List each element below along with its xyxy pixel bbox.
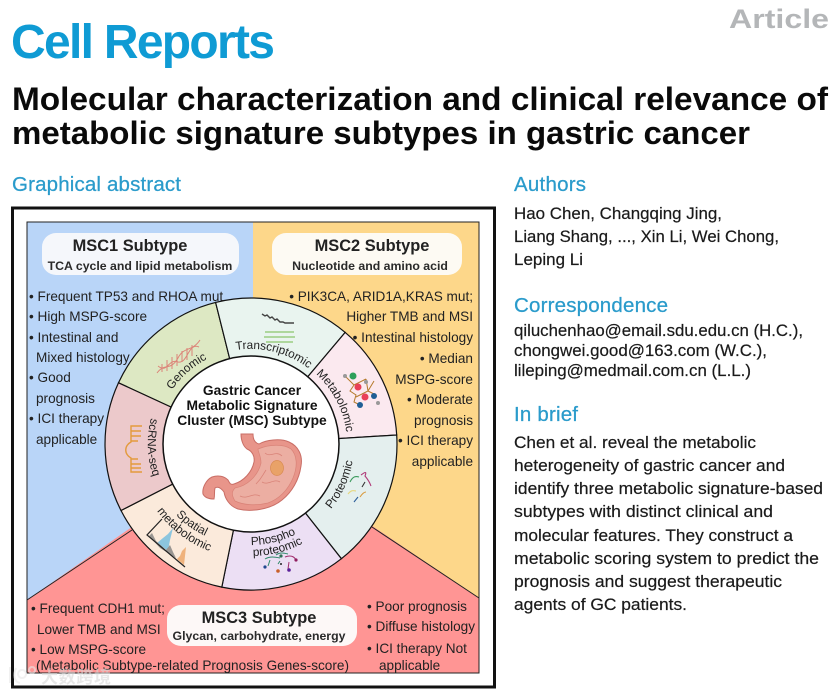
segment: genomic — [118, 302, 251, 444]
MSC3 features list right: applicable — [379, 658, 440, 673]
MSC3 features list right: • Poor prognosis — [367, 599, 467, 614]
segment: scRNA-seq — [105, 383, 251, 510]
ring label: Spatial metabolomic: Spatial — [177, 510, 208, 536]
in brief text: prognosis and suggest therapeutic — [514, 572, 782, 591]
heading: graphical abstract: Graphical abstract — [12, 173, 181, 196]
MSC1 heading pill — [42, 233, 239, 275]
authors text: Liang Shang, ..., Xin Li, Wei Chong, — [514, 227, 779, 246]
segment: metabolomic — [251, 332, 397, 444]
outer frame — [12, 208, 494, 687]
MSC2 heading pill — [272, 233, 462, 275]
watermark — [10, 667, 111, 687]
MSC1 features list: prognosis — [36, 391, 95, 406]
correspondence text: qiluchenhao@email.sdu.edu.cn (H.C.), — [514, 321, 803, 340]
in brief text: Chen et al. reveal the metabolic — [514, 433, 756, 452]
ring label: Metabolomic: Metabolomic — [316, 368, 354, 432]
MSC2 features list: • Median — [420, 351, 473, 366]
MSC2 features list: • Intestinal histology — [353, 330, 473, 345]
MSC3 features list left: • Frequent CDH1 mut; — [31, 601, 165, 616]
heading: authors: Authors — [514, 173, 586, 196]
panel: MSC3 background — [27, 444, 479, 673]
center title: Gastric Cancer — [203, 383, 302, 398]
in brief text: identify three metabolic signature-based — [514, 479, 823, 498]
MSC3 features list left: Lower TMB and MSI — [37, 622, 161, 637]
segment: proteomic — [251, 435, 397, 559]
MSC3 heading pill — [167, 605, 357, 646]
MSC2 features list: • Moderate — [407, 392, 473, 407]
authors text: Leping Li — [514, 250, 583, 269]
icon: single cell RNA — [126, 426, 142, 472]
MSC2 features list: MSPG-score — [395, 372, 473, 387]
MSC1 features list: • ICI therapy — [29, 411, 104, 426]
MSC3 features list left — [31, 601, 349, 673]
ring label: Proteomic: Proteomic — [325, 460, 352, 508]
MSC2 features list: applicable — [412, 454, 473, 469]
MSC2 features list: • ICI therapy — [398, 433, 473, 448]
in brief text: subtypes with distinct clinical and — [514, 502, 773, 521]
MSC1 features list — [29, 289, 223, 447]
icon: phospho protein fragments — [263, 553, 298, 573]
MSC1 features list: • High MSPG-score — [29, 309, 147, 324]
MSC1 features list: • Frequent TP53 and RHOA mut — [29, 289, 223, 304]
ring label: Transcriptomic: Transcriptomic — [235, 341, 312, 368]
MSC2 heading pill: MSC2 Subtype — [315, 237, 429, 255]
in brief text — [514, 433, 823, 614]
correspondence text: chongwei.good@163.com (W.C.), — [514, 341, 767, 360]
icon: molecule — [343, 372, 380, 408]
ring label: Spatial metabolomic: metabolomic — [157, 508, 211, 550]
MSC3 heading pill: Glycan, carbohydrate, energy — [173, 629, 346, 643]
MSC3 features list left: (Metabolic Subtype-related Prognosis Genes-score) — [36, 658, 349, 673]
journal logo: Cell Reports: Cell Reports — [11, 16, 275, 69]
MSC3 features list right: • Diffuse histology — [367, 619, 475, 634]
center title: Metabolic Signature — [186, 398, 318, 413]
in brief text: metabolic scoring system to predict the — [514, 549, 819, 568]
MSC2 features list: prognosis — [414, 413, 473, 428]
MSC1 features list: • Intestinal and — [29, 330, 118, 345]
authors text — [514, 204, 779, 269]
MSC3 features list right: • ICI therapy Not — [367, 641, 467, 656]
MSC2 features list: Higher TMB and MSI — [346, 309, 473, 324]
segment: phosphoproteomic — [222, 444, 341, 590]
heading: correspondence: Correspondence — [514, 294, 668, 317]
MSC3 features list left: • Low MSPG-score — [31, 642, 146, 657]
icon: protein fragments — [348, 472, 371, 502]
article label: Article — [729, 4, 829, 34]
ring label: scRNA-seq: scRNA-seq — [148, 418, 160, 477]
title: Molecular characterization and clinical relevance of — [12, 81, 828, 117]
MSC2 features list — [289, 289, 473, 469]
correspondence text: lileping@medmail.com.cn (L.L.) — [514, 361, 751, 380]
panel: MSC2 background — [253, 222, 479, 622]
MSC1 features list: • Good — [29, 370, 71, 385]
MSC2 features list: • PIK3CA, ARID1A,KRAS mut; — [289, 289, 473, 304]
MSC1 features list: applicable — [36, 432, 97, 447]
segment: spatial metabolomic — [121, 444, 251, 587]
title — [12, 81, 828, 151]
ring label: Genomic: Genomic — [167, 354, 206, 388]
panel: MSC1 background — [27, 222, 253, 622]
in brief text: heterogeneity of gastric cancer and — [514, 456, 785, 475]
ring label: Phospho proteomic: proteomic — [254, 538, 302, 558]
MSC1 heading pill: MSC1 Subtype — [73, 237, 187, 255]
center title — [177, 383, 327, 428]
graphical abstract figure — [9, 173, 823, 688]
MSC2 heading pill: Nucleotide and amino acid — [292, 259, 448, 273]
center title: Cluster (MSC) Subtype — [177, 413, 327, 428]
heading: in brief: In brief — [514, 403, 578, 426]
icon: DNA helix — [157, 340, 200, 373]
MSC1 features list: Mixed histology — [36, 350, 130, 365]
diagram: omics ring — [104, 297, 398, 591]
icon: stomach — [203, 434, 301, 510]
MSC1 heading pill: TCA cycle and lipid metabolism — [48, 259, 232, 273]
watermark: 大数跨境 — [41, 667, 111, 687]
in brief text: agents of GC patients. — [514, 595, 687, 614]
authors text: Hao Chen, Changqing Jing, — [514, 204, 722, 223]
in brief text: molecular features. They construct a — [514, 526, 794, 545]
MSC3 features list right — [367, 599, 475, 673]
segment: transcriptomic — [216, 298, 345, 444]
icon: RNA strands — [262, 314, 295, 342]
correspondence text — [514, 321, 803, 380]
title: metabolic signature subtypes in gastric cancer — [12, 115, 750, 151]
MSC3 heading pill: MSC3 Subtype — [202, 609, 316, 627]
icon: spectrum chart — [147, 519, 186, 567]
ring label: Phospho proteomic: Phospho — [252, 530, 295, 546]
